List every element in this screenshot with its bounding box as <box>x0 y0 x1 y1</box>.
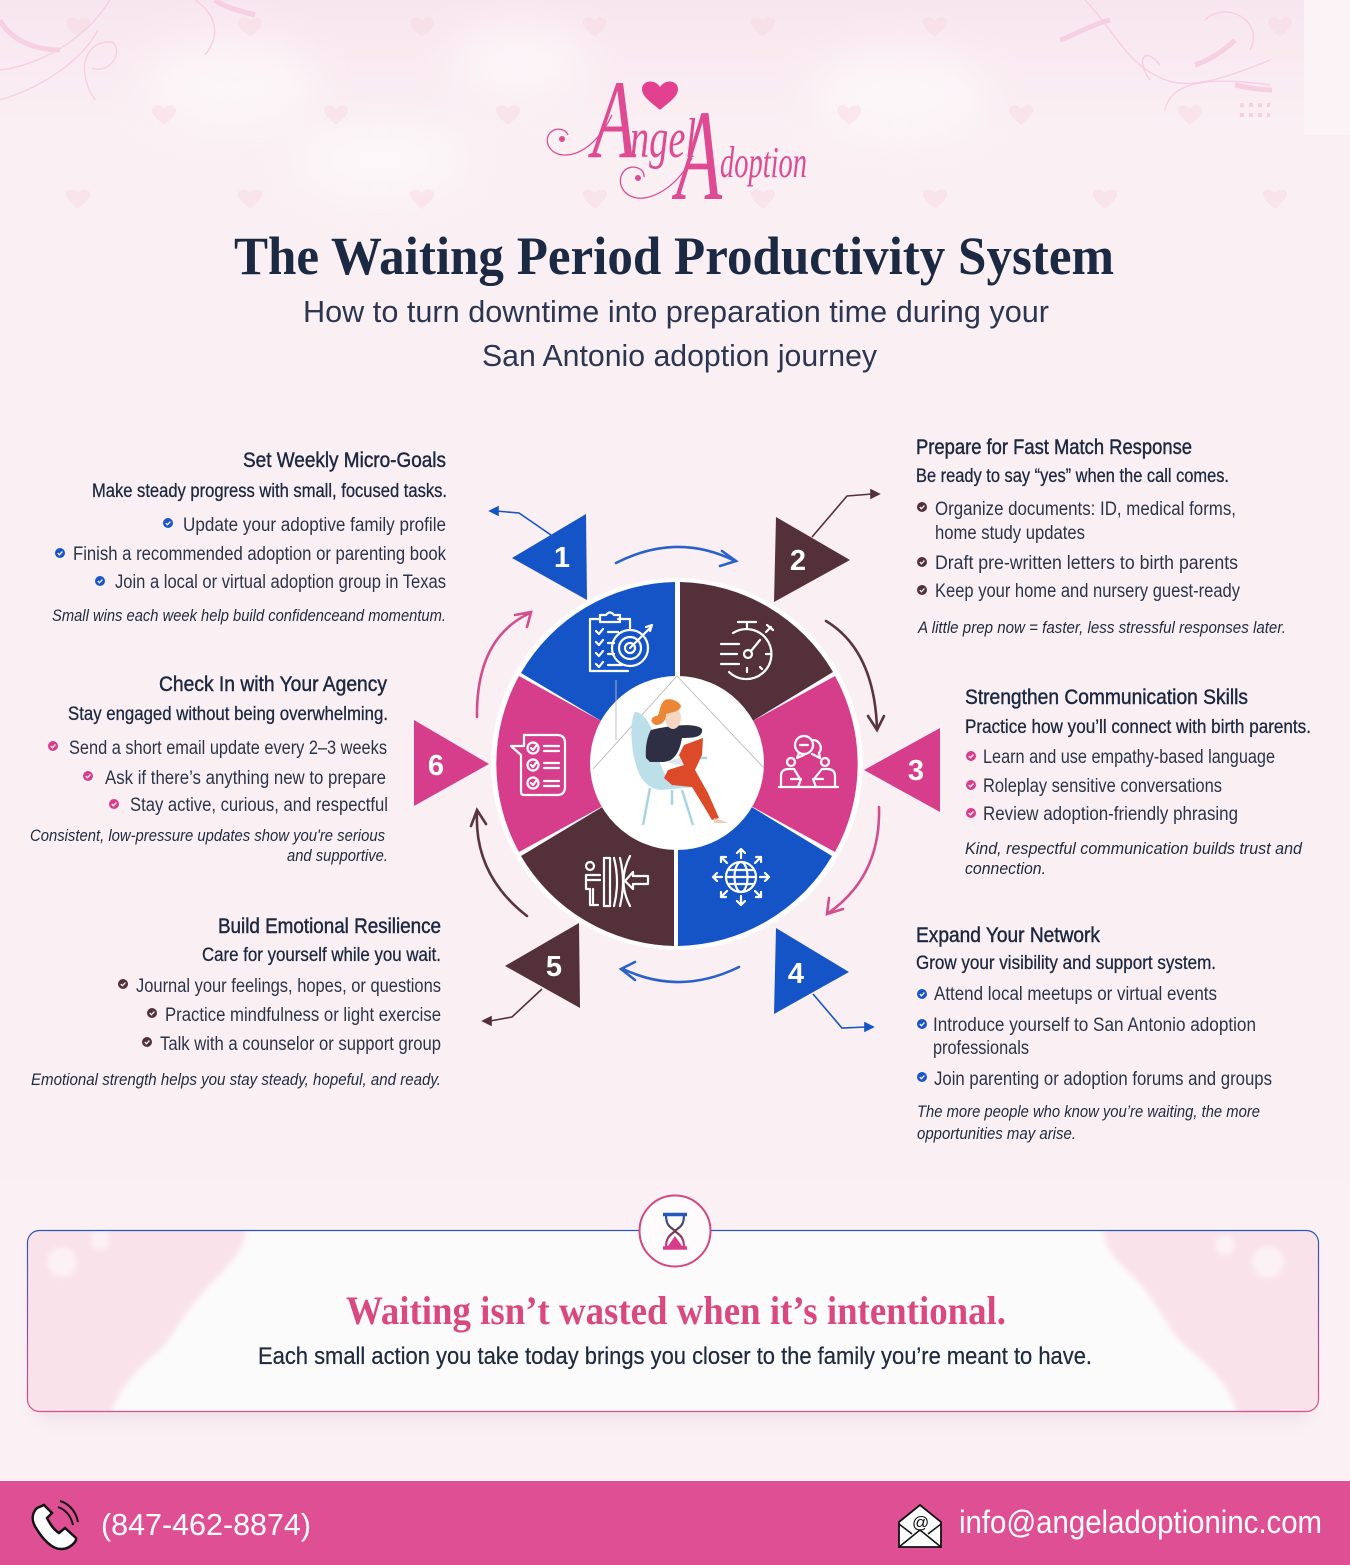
heading: Check In with Your Agency <box>159 673 387 696</box>
checklist: Join a local or virtual adoption group in Texas <box>115 572 446 593</box>
checklist <box>48 738 388 816</box>
triangle 5: 5 <box>546 951 562 983</box>
logo: Angel Adoption: A <box>587 58 636 182</box>
callout heading: Waiting isn’t wasted when it’s intentional. <box>346 1288 1006 1333</box>
leader arrow 2 <box>812 490 879 537</box>
checklist: Update your adoptive family profile <box>183 515 446 536</box>
checklist <box>917 984 1272 1090</box>
icon: stopwatch <box>721 622 773 679</box>
phone number: (847-462-8874) <box>101 1507 311 1542</box>
icon: checklist speech bubble <box>511 735 565 795</box>
panel: step 4 expand network <box>916 924 1272 1143</box>
note: opportunities may arise. <box>917 1124 1076 1143</box>
note <box>30 826 388 865</box>
icon: two people talking <box>779 736 838 787</box>
triangle 5 <box>505 923 580 1008</box>
triangle 2: 2 <box>790 545 806 577</box>
note <box>965 839 1303 878</box>
triangle 6: 6 <box>428 750 444 782</box>
checklist: Finish a recommended adoption or parenting book <box>73 544 446 565</box>
icon: person pushing wall <box>586 856 648 906</box>
checklist: Ask if there’s anything new to prepare <box>105 768 386 789</box>
segment 3 <box>751 676 858 852</box>
checklist: Keep your home and nursery guest-ready <box>935 581 1240 602</box>
subheading: Practice how you’ll connect with birth parents. <box>965 717 1311 738</box>
checklist: Send a short email update every 2–3 weeks <box>69 738 387 759</box>
checklist: Roleplay sensitive conversations <box>983 776 1222 797</box>
checklist: Practice mindfulness or light exercise <box>165 1005 441 1026</box>
subheading: Be ready to say “yes” when the call comes. <box>916 466 1229 487</box>
segment 1 <box>521 582 675 722</box>
icon: clipboard with target <box>590 612 652 671</box>
triangle 1 <box>512 514 587 600</box>
checklist: Learn and use empathy-based language <box>983 747 1275 768</box>
checklist <box>966 747 1275 825</box>
center illustration: woman in chair <box>590 676 764 850</box>
checklist <box>917 499 1240 602</box>
icon: envelope <box>899 1505 941 1547</box>
checklist: Introduce yourself to San Antonio adoption <box>933 1015 1256 1036</box>
segment 4 <box>678 806 832 946</box>
callout text: Each small action you take today brings you closer to the family you’re meant to have. <box>258 1343 1092 1370</box>
note: A little prep now = faster, less stressful responses later. <box>917 618 1286 637</box>
leader arrow 5 <box>483 989 542 1025</box>
title: The Waiting Period Productivity System <box>234 226 1114 286</box>
footer bar <box>0 1481 1350 1565</box>
note: Consistent, low-pressure updates show you're serious <box>30 826 385 845</box>
note: The more people who know you’re waiting, the more <box>917 1102 1260 1121</box>
icon: envelope: @ <box>912 1513 929 1532</box>
cycle arrow right upper <box>826 621 884 730</box>
chair <box>631 712 707 825</box>
cycle diagram <box>414 490 940 1031</box>
segment 6 <box>496 676 603 852</box>
checklist: Stay active, curious, and respectful <box>130 795 388 816</box>
subheading: Grow your visibility and support system. <box>916 953 1216 974</box>
leader arrow 4 <box>813 994 873 1031</box>
email address: info@angeladoptioninc.com <box>959 1504 1322 1540</box>
heading: Prepare for Fast Match Response <box>916 436 1192 459</box>
note: connection. <box>965 859 1046 878</box>
panel: step 5 emotional resilience <box>31 915 441 1089</box>
checklist: Organize documents: ID, medical forms, <box>935 499 1236 520</box>
subheading: Make steady progress with small, focused tasks. <box>92 481 447 502</box>
triangle 4: 4 <box>788 958 804 990</box>
checklist: Talk with a counselor or support group <box>160 1034 441 1055</box>
logo: Angel Adoption: A <box>671 84 722 228</box>
checklist <box>55 515 446 593</box>
heading: Set Weekly Micro-Goals <box>243 449 446 472</box>
triangle 4 <box>774 928 849 1014</box>
logo: Angel Adoption <box>547 58 807 228</box>
cycle arrow left upper <box>477 612 531 717</box>
triangle 6 <box>414 720 489 806</box>
panel: step 2 fast match response <box>916 436 1286 637</box>
icon: phone <box>33 1501 78 1549</box>
note <box>917 1102 1260 1143</box>
subtitle: San Antonio adoption journey <box>482 338 877 373</box>
icon: globe with arrows <box>713 849 769 905</box>
wheel ring <box>491 578 863 950</box>
subtitle: How to turn downtime into preparation time during your <box>303 294 1049 329</box>
logo: Angel Adoption: doption <box>720 138 807 187</box>
body <box>646 699 729 823</box>
subheading: Care for yourself while you wait. <box>202 945 441 966</box>
logo: Angel Adoption: ngel <box>630 108 696 170</box>
panel: step 3 communication skills <box>965 686 1311 878</box>
checklist: Attend local meetups or virtual events <box>934 984 1217 1005</box>
checklist: home study updates <box>935 523 1085 544</box>
heading: Expand Your Network <box>916 924 1100 947</box>
panel: step 1 weekly micro-goals <box>52 449 447 625</box>
icon: hourglass <box>640 1196 710 1266</box>
checklist <box>118 976 441 1055</box>
triangle 3 <box>864 728 940 812</box>
checklist: professionals <box>933 1038 1029 1059</box>
flourishes <box>0 0 1272 115</box>
heading: Build Emotional Resilience <box>218 915 441 938</box>
checklist: Draft pre-written letters to birth parents <box>935 553 1238 574</box>
note: Small wins each week help build confidenceand momentum. <box>52 606 446 625</box>
checklist: Review adoption-friendly phrasing <box>983 804 1238 825</box>
cycle arrow bottom <box>621 962 739 982</box>
triangle 1: 1 <box>554 542 570 574</box>
cycle arrow right lower <box>827 807 879 914</box>
segment 2 <box>680 582 833 722</box>
note: Kind, respectful communication builds trust and <box>965 839 1303 858</box>
logo heart <box>642 81 678 110</box>
callout panel <box>20 1196 1330 1420</box>
segment 5 <box>521 806 674 946</box>
triangle 3: 3 <box>908 755 924 787</box>
checklist: Join parenting or adoption forums and groups <box>934 1069 1272 1090</box>
heading: Strengthen Communication Skills <box>965 686 1248 709</box>
note: and supportive. <box>287 846 388 865</box>
leader arrow 1 <box>490 507 551 535</box>
subheading: Stay engaged without being overwhelming. <box>68 704 388 725</box>
cycle arrow left lower <box>471 810 527 916</box>
panel: step 6 check in with agency <box>30 673 388 865</box>
cycle arrow top <box>616 547 736 566</box>
note: Emotional strength helps you stay steady, hopeful, and ready. <box>31 1070 441 1089</box>
checklist: Journal your feelings, hopes, or questions <box>136 976 441 997</box>
subtitle <box>303 294 1049 373</box>
triangle 2 <box>774 517 850 602</box>
